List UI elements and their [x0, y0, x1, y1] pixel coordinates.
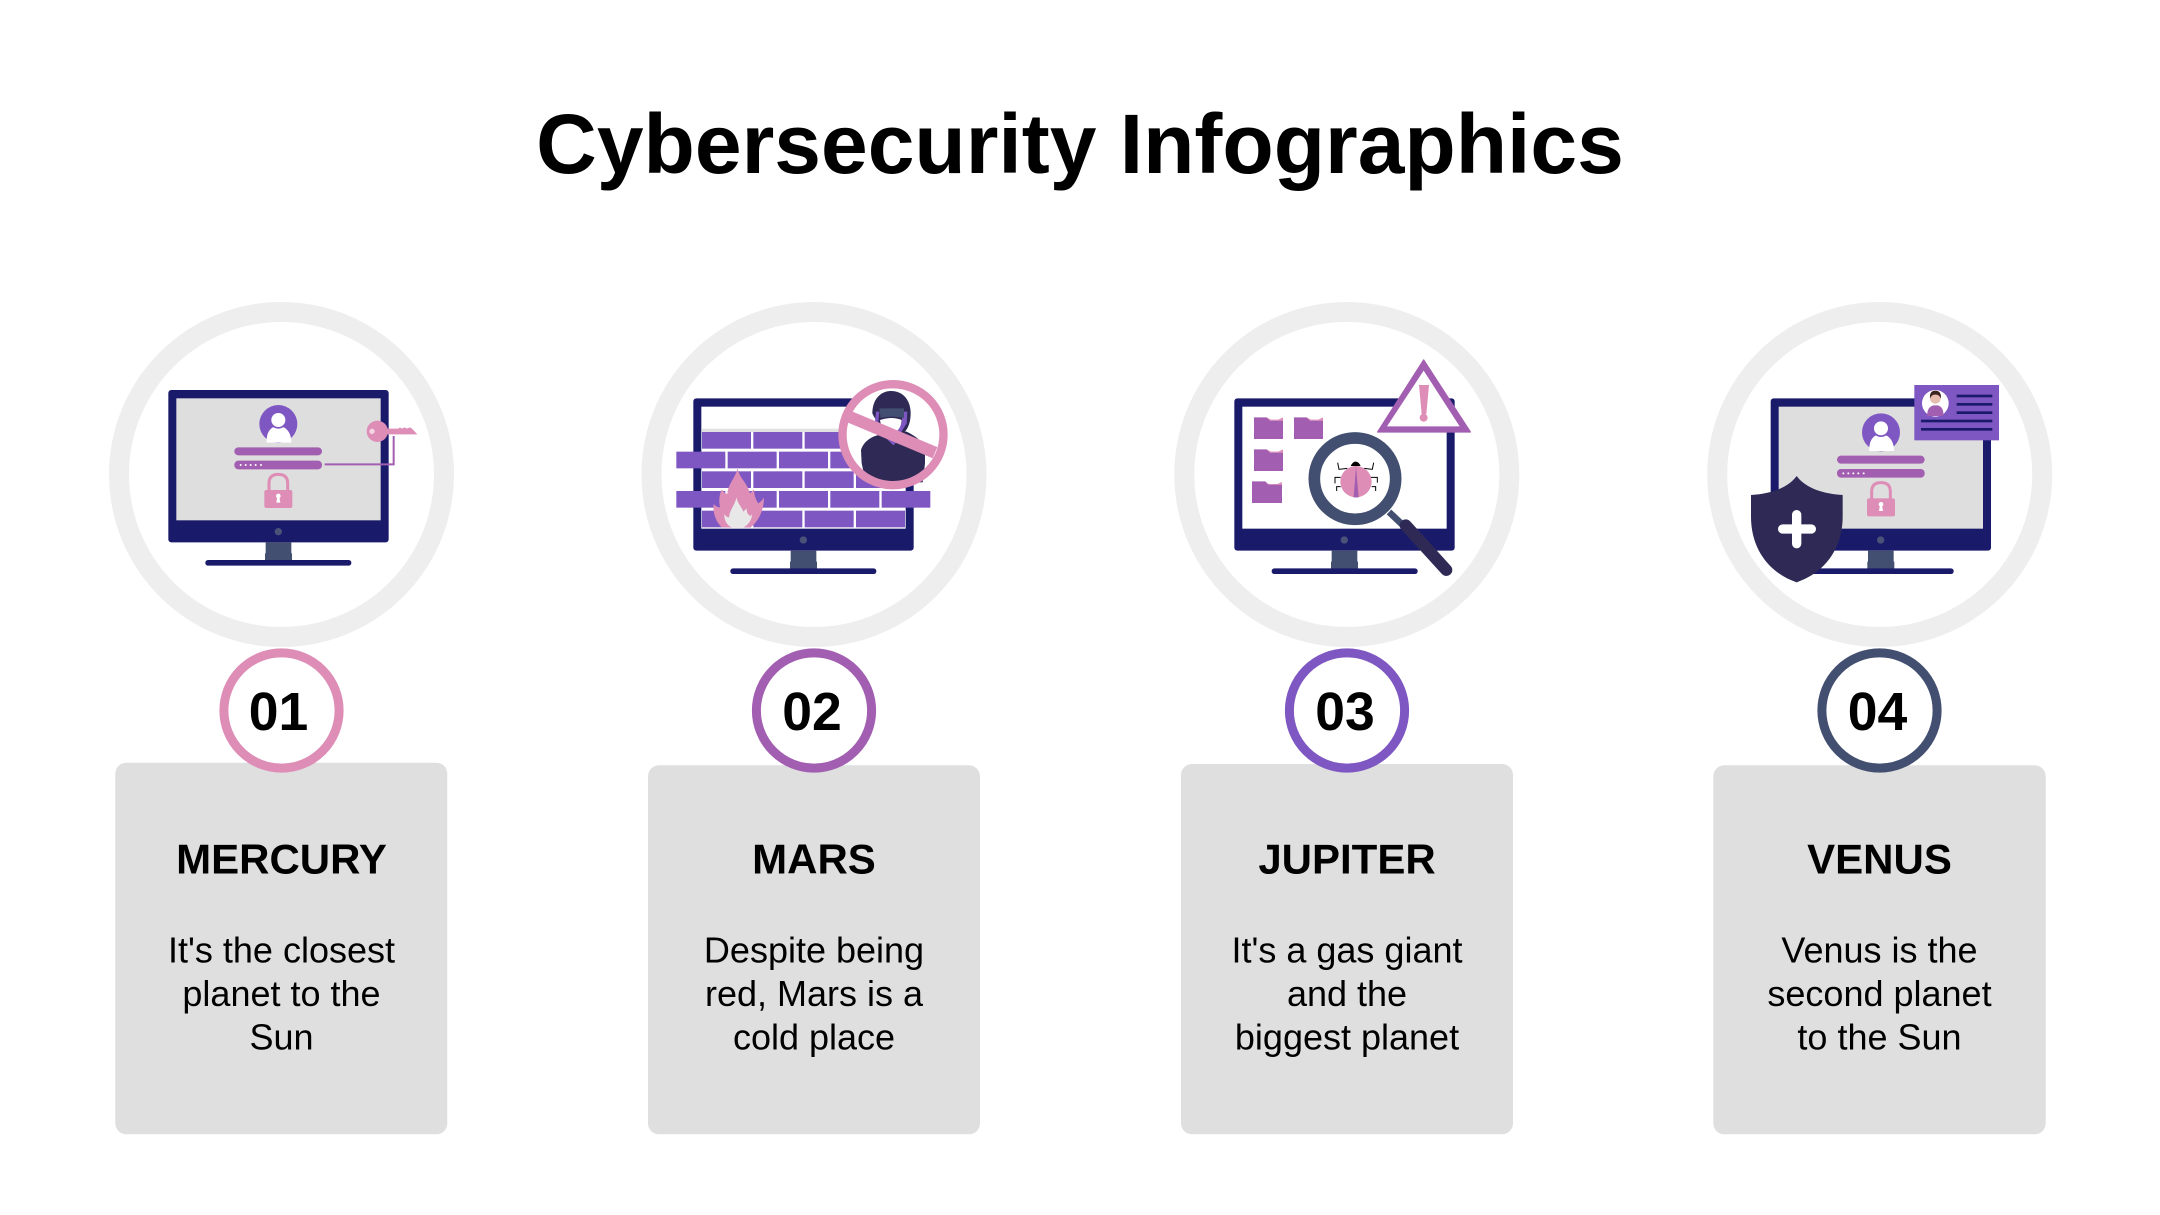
panel: 01 Mercury	[115, 312, 447, 1134]
text: Mercury description: It's the closest	[168, 930, 395, 970]
heading: Mercury: MERCURY	[176, 836, 387, 882]
text: Mercury description	[168, 930, 395, 1057]
card: Venus	[1713, 765, 2046, 1134]
ring: Jupiter	[1184, 312, 1509, 637]
text: Jupiter description: biggest planet	[1235, 1016, 1459, 1057]
text: Mars description	[704, 930, 924, 1057]
number badge 01	[224, 653, 339, 768]
text: Venus description	[1767, 930, 1992, 1057]
card: Mars	[648, 765, 980, 1134]
title: Cybersecurity Infographics	[536, 97, 1624, 191]
text: Jupiter description: and the	[1287, 973, 1407, 1014]
number badge 02	[756, 653, 872, 768]
heading: Venus: VENUS	[1807, 836, 1952, 882]
number badge 03	[1289, 653, 1405, 768]
number badge 01: 01	[249, 683, 308, 742]
text: Mercury description: planet to the	[182, 973, 381, 1014]
number badge 04	[1822, 653, 1937, 768]
text: Mars description: Despite being	[704, 930, 924, 970]
heading: Mars: MARS	[752, 836, 876, 882]
text: Mercury description: Sun	[249, 1016, 314, 1057]
text: Venus description: second planet	[1767, 973, 1992, 1014]
icon: monitor with folders, bug under magnifier and warning	[1234, 360, 1470, 574]
icon: monitor login with shield and ID card	[1751, 385, 1999, 582]
text: Venus description: Venus is the	[1781, 930, 1978, 970]
icon: monitor firewall with blocked hacker	[676, 384, 943, 574]
panel: 02 Mars	[648, 312, 980, 1134]
text: Mars description: cold place	[733, 1016, 895, 1057]
ring: Mars	[652, 312, 976, 637]
ring: Mercury	[119, 312, 444, 637]
number badge 02: 02	[782, 683, 842, 742]
card: Jupiter	[1181, 764, 1513, 1134]
number badge 04: 04	[1848, 683, 1907, 742]
panel: 04 Venus	[1713, 312, 2046, 1134]
panel: 03 Jupiter	[1181, 312, 1513, 1134]
icon: monitor login with key	[168, 390, 417, 566]
text: Venus description: to the Sun	[1797, 1016, 1962, 1057]
ring: Venus	[1717, 312, 2042, 637]
number badge 03: 03	[1315, 683, 1375, 742]
text: Jupiter description: It's a gas giant	[1231, 930, 1463, 970]
card: Mercury	[115, 763, 447, 1134]
text: Mars description: red, Mars is a	[705, 973, 924, 1014]
heading: Jupiter: JUPITER	[1258, 836, 1436, 882]
text: Jupiter description	[1231, 930, 1463, 1057]
